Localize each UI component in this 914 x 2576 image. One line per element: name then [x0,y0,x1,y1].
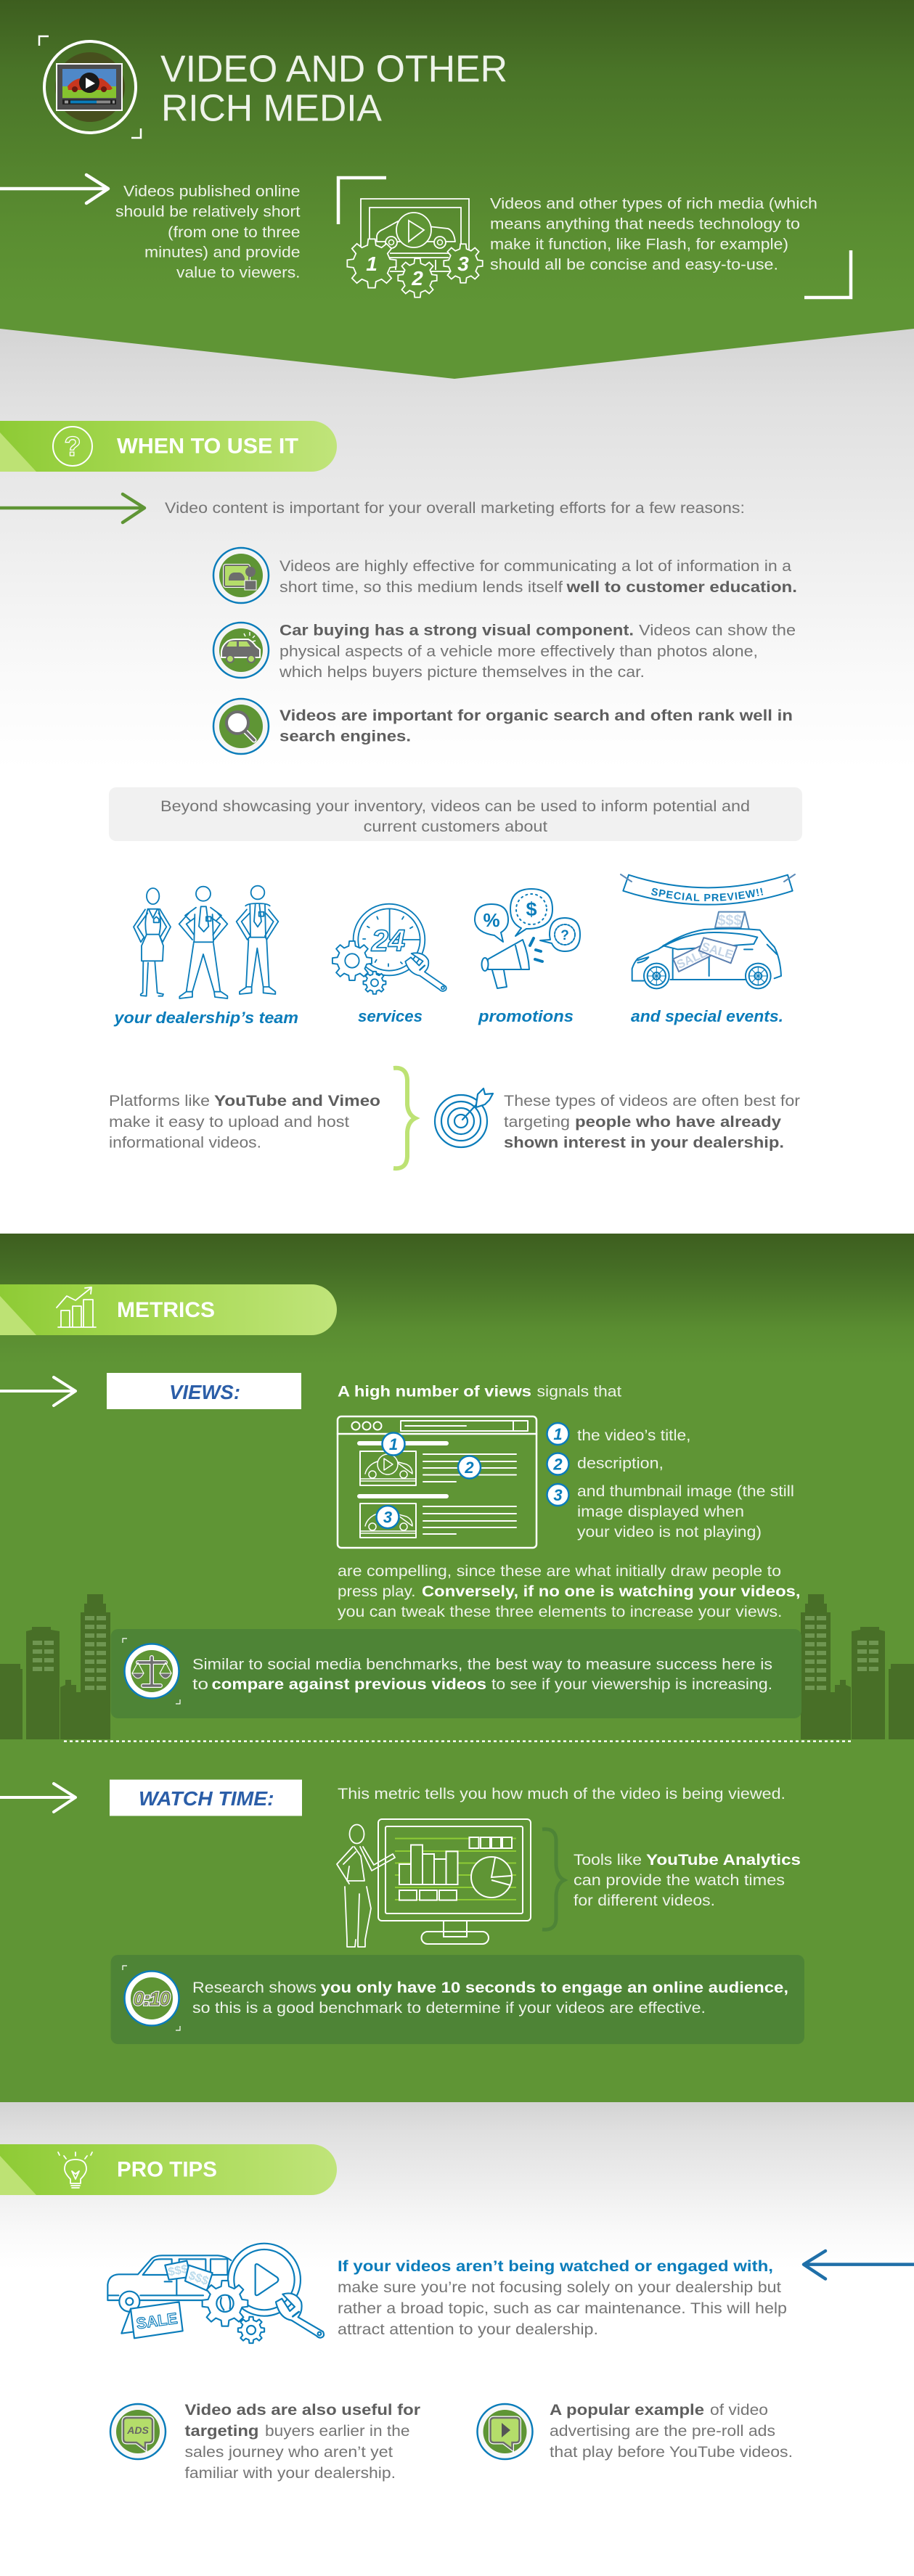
panel: ten seconds callout: Research shows [192,1980,317,1996]
text: intro short videos: should be relatively short [115,204,301,221]
dotted divider [64,1740,852,1742]
skyline [0,1594,914,1739]
icon: special events car and banner: SALE [700,940,735,961]
text: targeting: These types of videos are often best for [504,1093,800,1109]
illustration: car, play button, gears and sale sign: $$$ [167,2262,189,2279]
text: youtube analytics [574,1852,801,1909]
header banner [0,0,914,379]
text: pro tip main: rather a broad topic, such as car maintenance. This will help [338,2300,787,2317]
icon: promotions megaphone and bubbles [475,889,580,988]
icon: car video with numbered gears: 1 [366,253,378,275]
icon: promotions megaphone and bubbles: % [483,909,500,931]
text: reasons intro: Video content is important for your overall marketing efforts for a few reasons: [165,500,745,517]
captions: and special events. [631,1007,783,1025]
text: views conclusion: Conversely, if no one is watching your videos, [422,1583,800,1600]
text: targeting: people who have already [575,1114,781,1131]
text: rich media definition: should all be concise and easy-to-use. [490,256,778,273]
panel: benchmark callout: compare against previous videos [212,1676,486,1693]
text: visual component: which helps buyers picture themselves in the car. [279,664,645,681]
text: targeting [504,1093,800,1151]
text: youtube analytics: Tools like [574,1852,642,1869]
text: pro tip main [338,2258,787,2338]
text: intro short videos: minutes) and provide [144,245,301,261]
text: pre-roll: of video [710,2402,768,2419]
panel: ten seconds callout: 0:10 [134,1989,170,2009]
badges on browser: 1 [389,1435,398,1453]
icon: car video with numbered gears [347,199,483,298]
title: RICH MEDIA [161,87,382,129]
icon: ads bubble [110,2404,166,2459]
icon: special events car and banner [621,874,795,988]
numbered list: your video is not playing) [577,1524,762,1541]
panel: beyond inventory callout: Beyond showcasing your inventory, videos can be used to inform potential and [160,798,750,815]
metrics heading [0,1284,337,1335]
panel: benchmark callout [111,1629,801,1718]
panel: ten seconds callout [111,1955,804,2044]
text: views conclusion: press play. [338,1583,415,1600]
pro tips heading: PRO TIPS [117,2158,217,2181]
text: pro tip main: make sure you’re not focusing solely on your dealership but [338,2279,781,2296]
banner text: SPECIAL PREVIEW!! [651,888,764,901]
numbered list: image displayed when [577,1504,744,1520]
arrow: green [0,494,144,522]
text: intro short videos: (from one to three [168,224,301,241]
bracket frame [338,178,851,298]
pro tips heading [0,2144,337,2195]
captions: your dealership’s team [113,1009,298,1027]
icon: car video with numbered gears: 2 [411,267,423,290]
text: customer education: Videos are highly effective for communicating a lot of information in a [279,558,791,575]
text: views lead: A high number of views [338,1383,531,1400]
brace dark [542,1829,564,1929]
title [160,48,507,129]
label: views [107,1373,301,1409]
text: rich media definition: make it function, like Flash, for example) [490,237,788,253]
icon: services clock and gears: 24 [371,924,405,958]
text: intro short videos: value to viewers. [176,264,301,282]
text: pro tip main: attract attention to your dealership. [338,2321,598,2338]
text: video ads [184,2402,420,2482]
text: views conclusion: you can tweak these three elements to increase your views. [338,1604,783,1620]
panel: benchmark callout: Similar to social media benchmarks, the best way to measure success here is [192,1657,772,1673]
panel: beyond inventory callout: current customers about [364,819,547,835]
label: watch time [110,1779,302,1816]
icon: car visual [213,623,269,678]
text: rich media definition: means anything that needs technology to [490,216,800,233]
text: targeting: shown interest in your dealership. [504,1134,784,1151]
numbered list: and thumbnail image (the still [577,1483,794,1500]
arrow: intro [0,175,108,203]
panel: beyond inventory callout [109,787,802,841]
text: views conclusion [338,1563,800,1620]
numbered list: description, [577,1456,664,1472]
illustration: car, play button, gears and sale sign [107,2244,324,2343]
icon: promotions megaphone and bubbles: ? [560,928,569,943]
text: platforms: make it easy to upload and host [109,1114,349,1131]
text: views lead [338,1383,621,1400]
text: organic search: search engines. [279,728,411,745]
arrow: blue [804,2251,914,2278]
panel: ten seconds callout: so this is a good benchmark to determine if your videos are effective. [192,2000,706,2017]
text: pre-roll [550,2402,793,2461]
icon: special events car and banner: SALE [674,946,709,972]
icon: dealership team [134,886,278,998]
numbered list: 3 [553,1486,563,1504]
text: intro short videos: Videos published online [123,184,301,200]
text: youtube analytics: YouTube Analytics [646,1852,801,1869]
text: visual component: Videos can show the [639,623,796,639]
text: youtube analytics: for different videos. [574,1892,715,1909]
text: targeting: targeting [504,1114,570,1131]
text: platforms [109,1093,380,1151]
text: rich media definition [490,196,817,273]
text: views lead: signals that [537,1383,621,1400]
icon: car video with numbered gears: 3 [457,253,469,275]
text: video ads: targeting [184,2423,258,2440]
arrow: views [0,1377,76,1406]
text: platforms: informational videos. [109,1134,261,1151]
icon: promotions megaphone and bubbles: $ [526,898,537,920]
text: intro short videos [115,184,301,282]
metrics heading: METRICS [117,1298,215,1322]
icon: services clock and gears [332,904,446,994]
brace [393,1068,415,1168]
panel: when to use it heading: WHEN TO USE IT [117,435,298,459]
badges on browser: 3 [383,1509,392,1527]
badges on browser [376,1432,481,1528]
panel: metrics background [0,1234,914,2102]
panel: when to use it heading: ? [64,432,81,462]
text: rich media definition: Videos and other types of rich media (which [490,196,817,212]
text: visual component: physical aspects of a vehicle more effectively than photos alone, [279,644,758,660]
icon: video education [213,548,269,603]
icon: video player logo [39,36,141,138]
label: watch time: WATCH TIME: [139,1787,274,1810]
text: video ads: familiar with your dealership. [184,2465,396,2482]
text: watch time lead: This metric tells you how much of the video is being viewed. [338,1786,786,1802]
text: pre-roll: that play before YouTube videos. [550,2444,793,2461]
panel: ten seconds callout: you only have 10 seconds to engage an online audience, [321,1980,788,1996]
icon: ads bubble: ADS [126,2424,149,2436]
captions: promotions [478,1007,574,1025]
text: customer education: short time, so this medium lends itself [279,579,563,596]
numbered list [547,1423,794,1541]
text: views conclusion: are compelling, since these are what initially draw people to [338,1563,781,1580]
arrow: watch time [0,1784,76,1812]
text: platforms: YouTube and Vimeo [214,1093,380,1109]
icon: magnifier [213,699,269,754]
text: organic search: Videos are important for organic search and often rank well in [279,707,793,724]
icon: special events car and banner: $$$ [717,913,742,929]
numbered list: 2 [552,1456,563,1473]
panel: when to use it heading [0,421,337,472]
badges on browser: 2 [464,1459,474,1477]
text: platforms: Platforms like [109,1093,210,1109]
title: VIDEO AND OTHER [160,48,507,90]
text: customer education: well to customer education. [566,579,797,596]
text: video ads: sales journey who aren’t yet [184,2444,393,2461]
text: visual component: Car buying has a strong visual component. [279,623,634,639]
panel: benchmark callout: to see if your viewership is increasing. [491,1676,772,1693]
captions [113,1007,783,1027]
text: customer education [279,558,797,596]
text: video ads: buyers earlier in the [265,2423,409,2440]
text: video ads: Video ads are also useful for [184,2402,420,2419]
panel: benchmark callout: to [192,1676,208,1693]
label: views: VIEWS: [169,1381,240,1403]
text: pro tip main: If your videos aren’t being watched or engaged with, [338,2258,773,2275]
text: youtube analytics: can provide the watch times [574,1872,785,1889]
panel: ten seconds callout: 0:10 [134,1989,170,2009]
icon: target [435,1088,493,1147]
illustration: browser window [338,1416,536,1548]
illustration: car, play button, gears and sale sign: $$$ [187,2268,211,2288]
illustration: presenter with analytics monitor [337,1819,531,1947]
text: visual component [279,623,796,681]
icon: pre-roll bubble [478,2404,533,2459]
text: pre-roll: A popular example [550,2402,704,2419]
captions: services [358,1007,423,1025]
numbered list: the video’s title, [577,1427,691,1444]
numbered list: 1 [553,1425,563,1443]
text: organic search [279,707,793,745]
text: pre-roll: advertising are the pre-roll ads [550,2423,775,2440]
illustration: car, play button, gears and sale sign: SALE [135,2310,179,2332]
